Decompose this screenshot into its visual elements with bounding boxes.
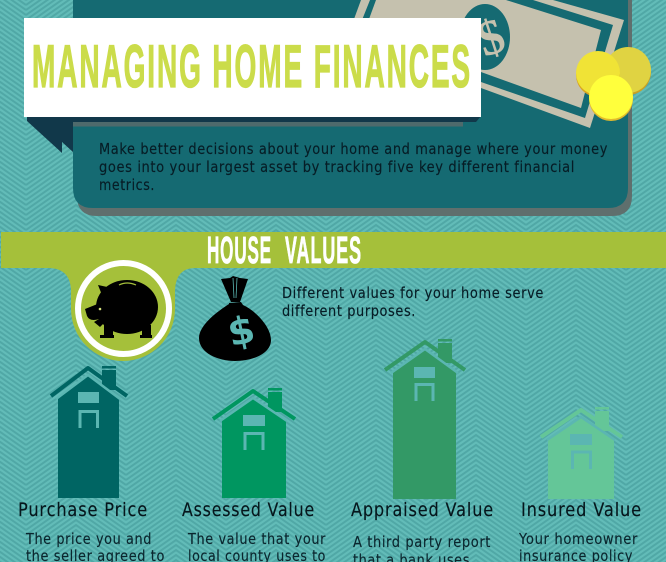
column: appraised value bbox=[351, 339, 494, 562]
icon: house purchase bbox=[51, 366, 127, 498]
icon: money bag: $ bbox=[224, 307, 259, 355]
icon: house appraised bbox=[385, 339, 465, 499]
text block: section intro bbox=[282, 284, 544, 320]
panel: intro bbox=[73, 0, 632, 216]
text block: intro: goes into your largest asset by tracking five key different financial bbox=[99, 158, 575, 176]
column: insured value bbox=[518, 407, 642, 562]
description: The value that your bbox=[187, 530, 326, 548]
description: Your homeowner bbox=[518, 530, 638, 548]
text block: section intro: Different values for your home serve bbox=[282, 284, 544, 302]
description bbox=[187, 530, 326, 562]
description bbox=[25, 530, 165, 562]
text block: intro: metrics. bbox=[99, 176, 155, 194]
title ribbon bbox=[27, 116, 481, 153]
icon: piggy bank bbox=[78, 263, 169, 354]
label: Insured Value bbox=[521, 499, 642, 521]
label: Assessed Value bbox=[182, 499, 315, 521]
description bbox=[353, 533, 491, 562]
icon: house insured bbox=[541, 407, 622, 499]
label: Appraised Value bbox=[351, 499, 494, 521]
description: A third party report bbox=[353, 533, 491, 551]
text block: intro bbox=[99, 140, 608, 194]
icon: house assessed bbox=[213, 388, 295, 498]
icon: dollar bill bbox=[350, 0, 624, 128]
label: Purchase Price bbox=[18, 499, 148, 521]
heading: HOUSE bbox=[207, 230, 272, 272]
column: purchase price bbox=[18, 366, 165, 562]
column: assessed value bbox=[182, 388, 326, 562]
title bbox=[24, 18, 481, 117]
icon: dollar bill: $ bbox=[470, 7, 512, 67]
icon: coins bbox=[576, 47, 651, 121]
icon: money bag bbox=[199, 276, 271, 361]
section band: house values bbox=[1, 230, 666, 361]
text block: section intro: different purposes. bbox=[282, 302, 416, 320]
description: The price you and bbox=[25, 530, 152, 548]
description bbox=[518, 530, 638, 562]
section band: house values: VALUES bbox=[285, 230, 362, 272]
